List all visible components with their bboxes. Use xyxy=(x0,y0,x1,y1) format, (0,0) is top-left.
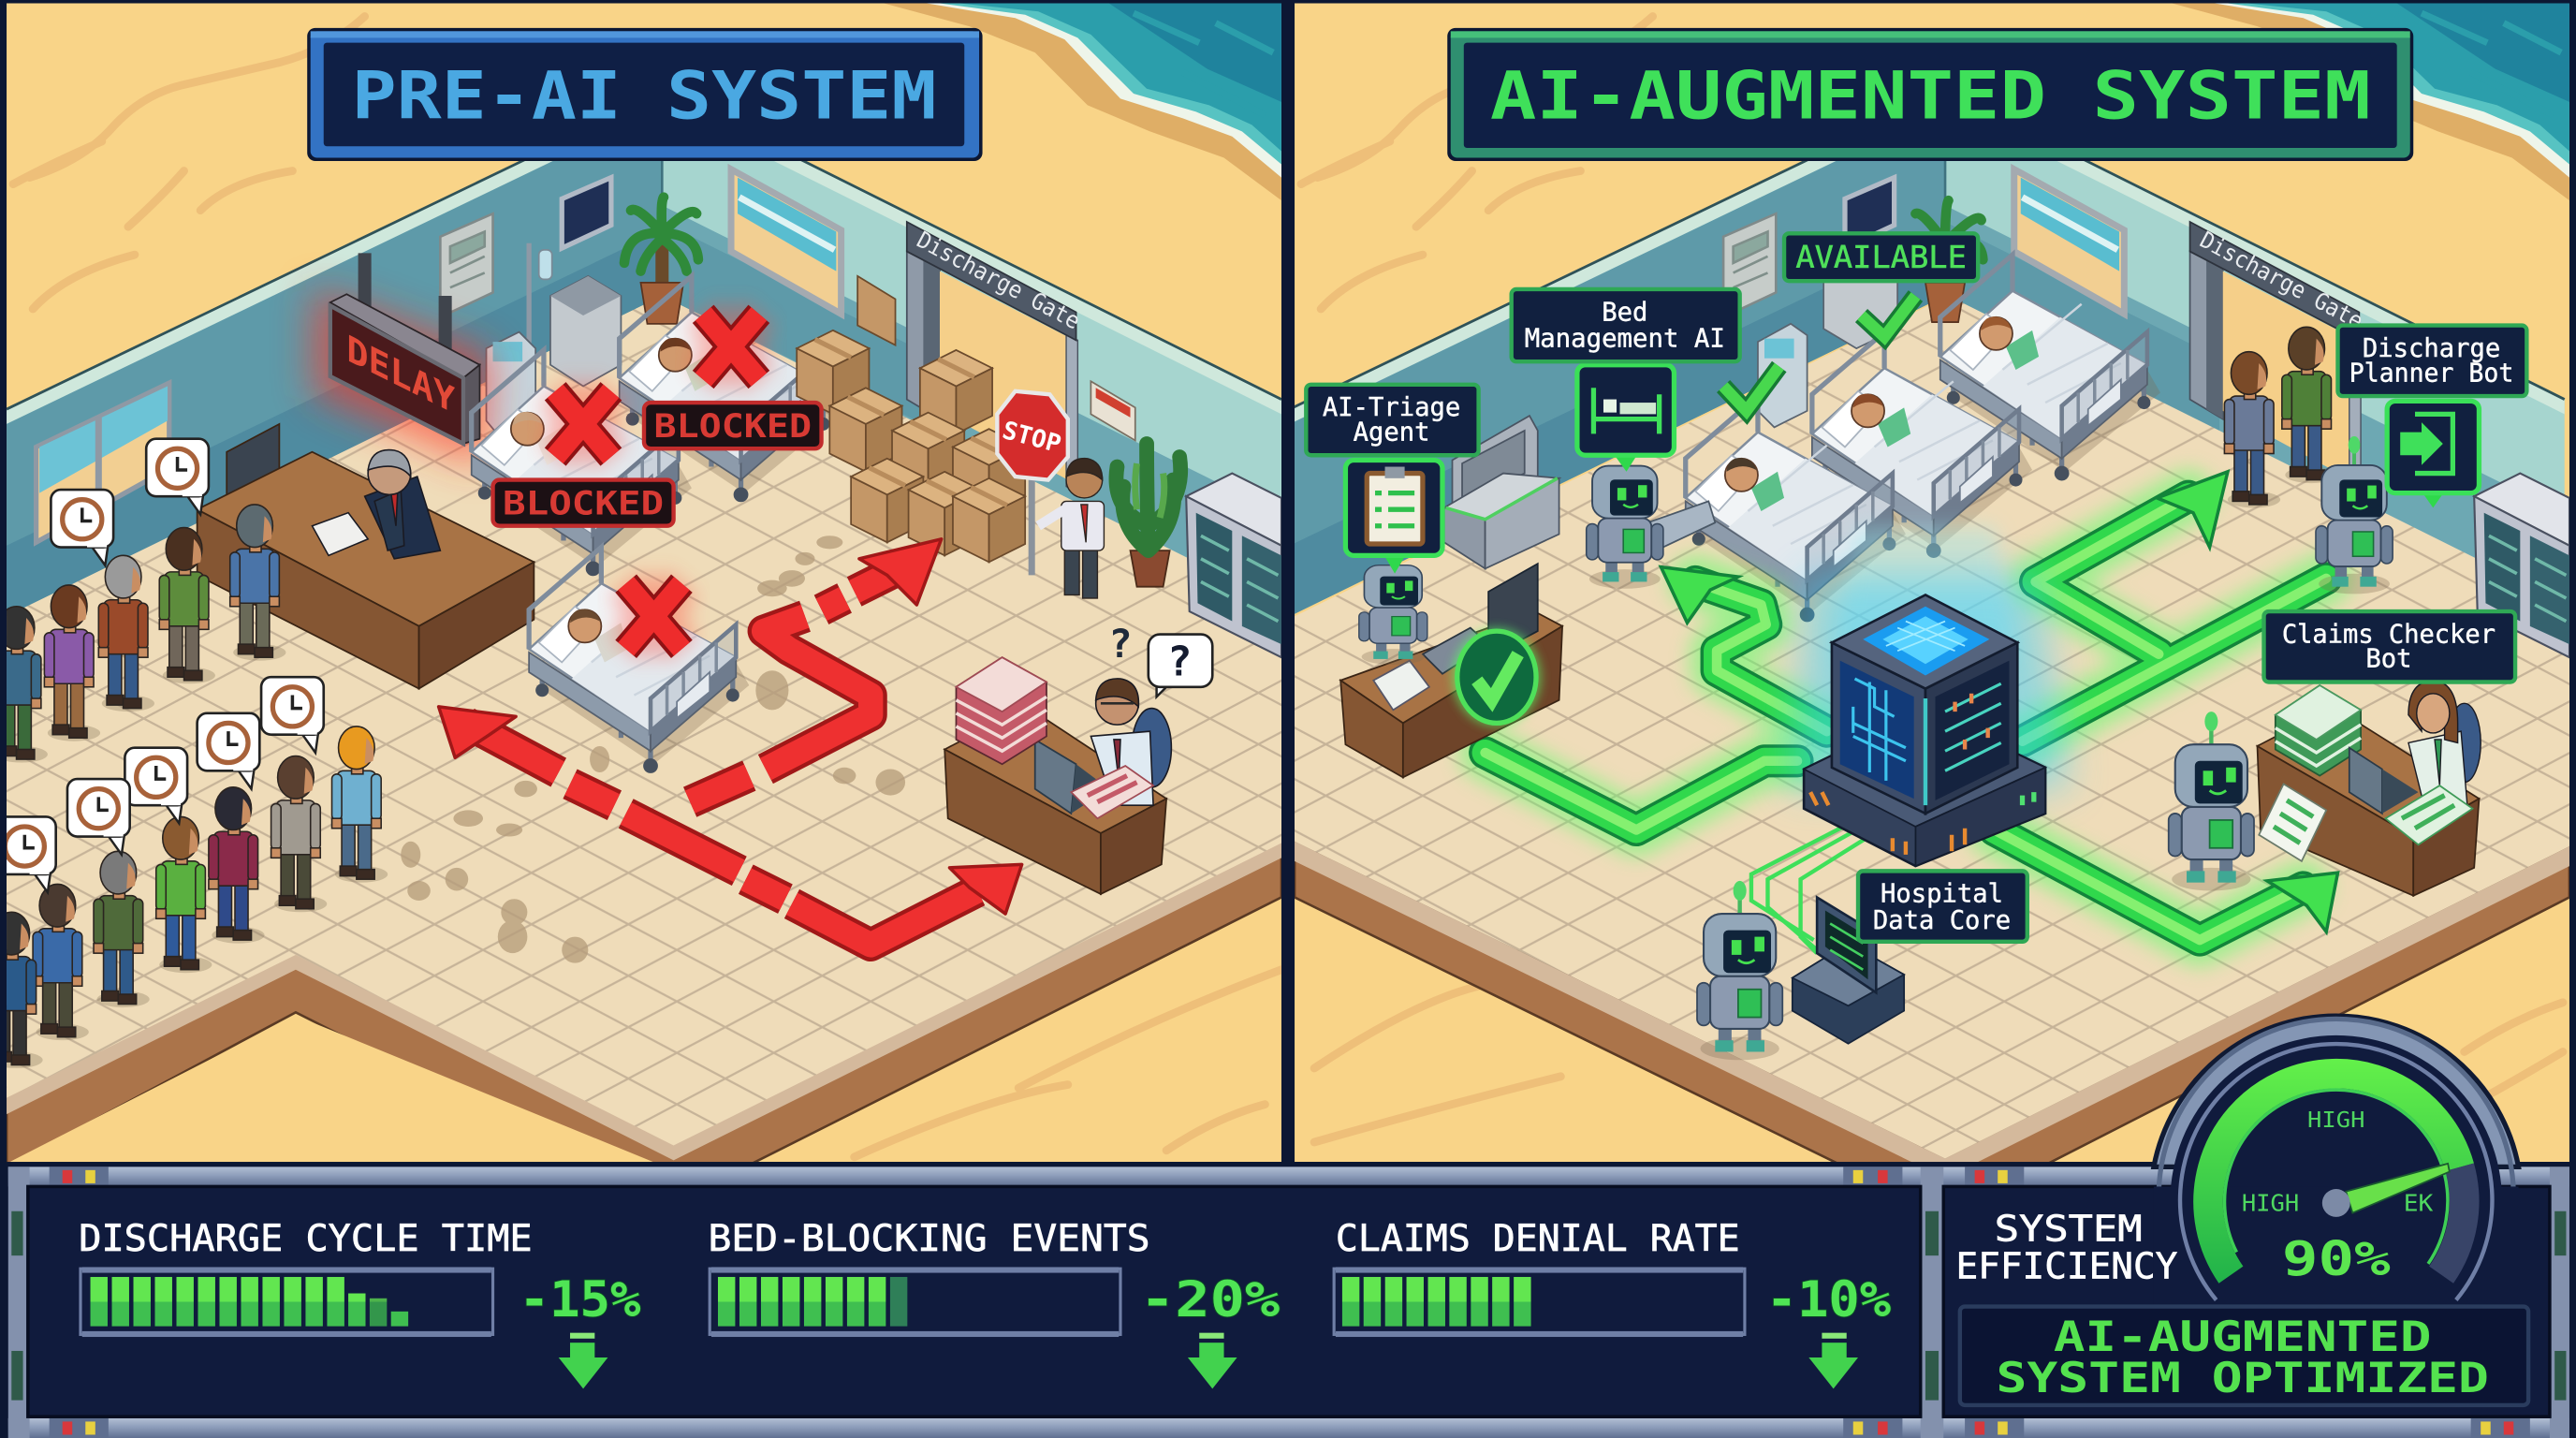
floor lip xyxy=(7,829,1281,1160)
dashboard frame xyxy=(0,1162,2576,1438)
label: AVAILABLE: AVAILABLE xyxy=(1795,239,1967,275)
beach sand xyxy=(1295,4,2569,1162)
terminal with robot xyxy=(1793,897,1904,1044)
tiled floor xyxy=(7,296,1281,1146)
check mark lower xyxy=(1723,366,1779,411)
BLOCKED label back xyxy=(644,403,822,448)
claims desk xyxy=(2258,707,2479,896)
metric: claims denial rate xyxy=(1334,1217,1891,1388)
sand below notch xyxy=(7,1016,657,1164)
status box xyxy=(1960,1307,2528,1405)
overworked staff desk xyxy=(944,707,1166,894)
system efficiency gauge: EK xyxy=(2404,1190,2434,1217)
stop sign xyxy=(997,391,1068,575)
icon: exit door xyxy=(2387,401,2479,507)
confused staff member xyxy=(1090,679,1171,805)
triage monitor and keyboard xyxy=(1373,564,1538,710)
icon: clipboard xyxy=(1345,461,1442,574)
metric: claims denial rate: -10% xyxy=(1766,1271,1891,1328)
panel: AI-augmented system scene xyxy=(1290,4,2569,1216)
metric: bed-blocking events: -20% xyxy=(1140,1271,1281,1328)
blocked X front xyxy=(555,391,611,457)
window on left wall xyxy=(37,383,169,542)
floor side xyxy=(7,829,1281,1162)
bed management robot xyxy=(1587,438,1715,589)
system efficiency gauge xyxy=(2154,1016,2519,1374)
label: AI-Triage Agent: Agent xyxy=(1354,418,1429,447)
blocked bed front xyxy=(472,350,692,576)
green data paths xyxy=(1486,472,2338,940)
label: Claims Checker Bot xyxy=(2264,611,2515,682)
circuit traces xyxy=(1751,825,1866,953)
room walls and wall decor xyxy=(7,161,1281,609)
laptop claims xyxy=(2349,748,2419,814)
blocked X lower xyxy=(626,583,681,649)
system efficiency gauge: HIGH xyxy=(2307,1108,2364,1133)
reception desk xyxy=(198,424,534,689)
medical equipment xyxy=(1758,253,1897,427)
discharge gate xyxy=(907,222,1085,493)
label: Bed Management AI xyxy=(1512,289,1740,361)
patients walking out xyxy=(2224,327,2338,507)
check mark upper xyxy=(1862,296,1915,337)
label: Hospital Data Core: Data Core xyxy=(1873,906,2011,935)
label: AI-Triage Agent: AI-Triage xyxy=(1323,393,1460,422)
room walls and wall decor xyxy=(1290,91,2565,616)
ocean shoreline xyxy=(884,4,1281,200)
reception clerk xyxy=(312,450,440,559)
floor lip xyxy=(1295,842,2569,1179)
label: Hospital Data Core: Hospital xyxy=(1881,880,2003,909)
green paper stack xyxy=(2276,685,2361,776)
red broken path xyxy=(439,539,1022,945)
core light beam xyxy=(1834,526,2014,657)
potted plant right xyxy=(1116,444,1180,587)
system efficiency label: EFFICIENCY xyxy=(1955,1246,2177,1288)
system efficiency label: SYSTEM xyxy=(1995,1208,2143,1250)
hospital data core xyxy=(1791,575,2070,866)
label: Discharge Planner Bot xyxy=(2338,326,2526,396)
warning poster xyxy=(1090,381,1135,440)
title: AI-AUGMENTED SYSTEM xyxy=(1447,28,2413,161)
floor side xyxy=(1295,842,2569,1216)
label: Bed Management AI: Bed xyxy=(1602,298,1647,327)
label: AI-Triage Agent xyxy=(1306,385,1479,455)
clock bubbles xyxy=(0,439,324,892)
status box: AI-AUGMENTED xyxy=(2054,1312,2432,1361)
label: Hospital Data Core xyxy=(1858,871,2027,942)
discharge gate xyxy=(2190,222,2368,493)
tiled floor xyxy=(1295,296,2569,1159)
question bubble: ? xyxy=(1167,638,1192,685)
papers on desk xyxy=(1071,766,1153,818)
label: AVAILABLE xyxy=(1784,233,1978,281)
checked papers on desk xyxy=(2385,785,2472,844)
server cabinet xyxy=(2474,474,2569,657)
title: PRE-AI SYSTEM xyxy=(307,28,983,161)
worker holding stop sign xyxy=(1038,459,1104,598)
metric: discharge cycle time: DISCHARGE CYCLE TIME xyxy=(79,1217,533,1260)
status box: SYSTEM OPTIMIZED xyxy=(1996,1353,2489,1402)
blocked bed back xyxy=(620,276,840,502)
label: Discharge Planner Bot: Discharge xyxy=(2363,334,2500,363)
beach sand xyxy=(7,4,1281,1162)
label: Claims Checker Bot: Claims Checker xyxy=(2282,620,2496,649)
IV stand and equipment xyxy=(487,243,621,440)
icon: bed xyxy=(1577,365,1674,472)
metric: bed-blocking events: BED-BLOCKING EVENTS xyxy=(708,1217,1150,1260)
front row of waiting patients xyxy=(0,505,285,763)
paper stack pink xyxy=(956,657,1046,764)
triage approved check xyxy=(1453,628,1541,726)
metric: bed-blocking events xyxy=(708,1217,1281,1388)
blocked X back xyxy=(703,314,759,380)
sand dune marks xyxy=(13,17,1281,1160)
metric: claims denial rate: CLAIMS DENIAL RATE xyxy=(1336,1217,1740,1260)
ocean shoreline xyxy=(2172,4,2569,200)
DELAY sign: DELAY xyxy=(346,327,455,423)
question bubble xyxy=(1149,635,1212,697)
data core robot xyxy=(1697,881,1782,1060)
second row of waiting patients xyxy=(0,726,388,1068)
box pile xyxy=(851,350,1025,562)
metric: discharge cycle time: -15% xyxy=(520,1271,641,1328)
claims staff woman xyxy=(2408,681,2481,809)
system efficiency gauge: HIGH xyxy=(2242,1190,2299,1217)
label: Discharge Planner Bot: Planner Bot xyxy=(2349,359,2513,388)
laptop xyxy=(1035,740,1109,814)
title: AI-AUGMENTED SYSTEM: AI-AUGMENTED SYSTEM xyxy=(1490,57,2371,134)
system efficiency label xyxy=(1955,1208,2177,1288)
BLOCKED label front xyxy=(493,480,674,526)
system efficiency gauge: 90% xyxy=(2282,1232,2391,1287)
stop sign: STOP xyxy=(1000,417,1063,459)
DELAY sign xyxy=(312,253,493,468)
blocked bed lower xyxy=(529,548,749,773)
glowing green data paths glow xyxy=(1486,496,2326,940)
hospital bed 2 xyxy=(1812,332,2032,558)
label: Bed Management AI: Management AI xyxy=(1525,324,1725,353)
metric: discharge cycle time xyxy=(79,1217,641,1388)
hospital bed 1 xyxy=(1686,396,1906,622)
small boxes behind xyxy=(797,276,902,472)
question mark: ? xyxy=(1108,621,1133,667)
claim document xyxy=(2259,784,2326,861)
triage desk xyxy=(1340,611,1562,777)
triage robot xyxy=(1359,543,1427,665)
potted palm xyxy=(624,198,698,324)
plant behind xyxy=(1909,200,1983,322)
claims checker robot xyxy=(2169,712,2254,890)
panel: pre-AI system scene xyxy=(0,4,1281,1203)
BLOCKED label back: BLOCKED xyxy=(654,407,812,446)
hospital bed 3 xyxy=(1940,255,2160,480)
floor dust xyxy=(401,536,905,963)
metrics dashboard xyxy=(0,1016,2576,1438)
workstation behind triage xyxy=(1444,416,1559,568)
server cabinet xyxy=(1186,474,1281,657)
discharge planner robot xyxy=(2316,436,2393,594)
title: PRE-AI SYSTEM: PRE-AI SYSTEM xyxy=(352,57,936,134)
label: Claims Checker Bot: Bot xyxy=(2365,645,2411,674)
BLOCKED label front: BLOCKED xyxy=(503,484,664,522)
sand dune marks xyxy=(1301,17,2563,1142)
